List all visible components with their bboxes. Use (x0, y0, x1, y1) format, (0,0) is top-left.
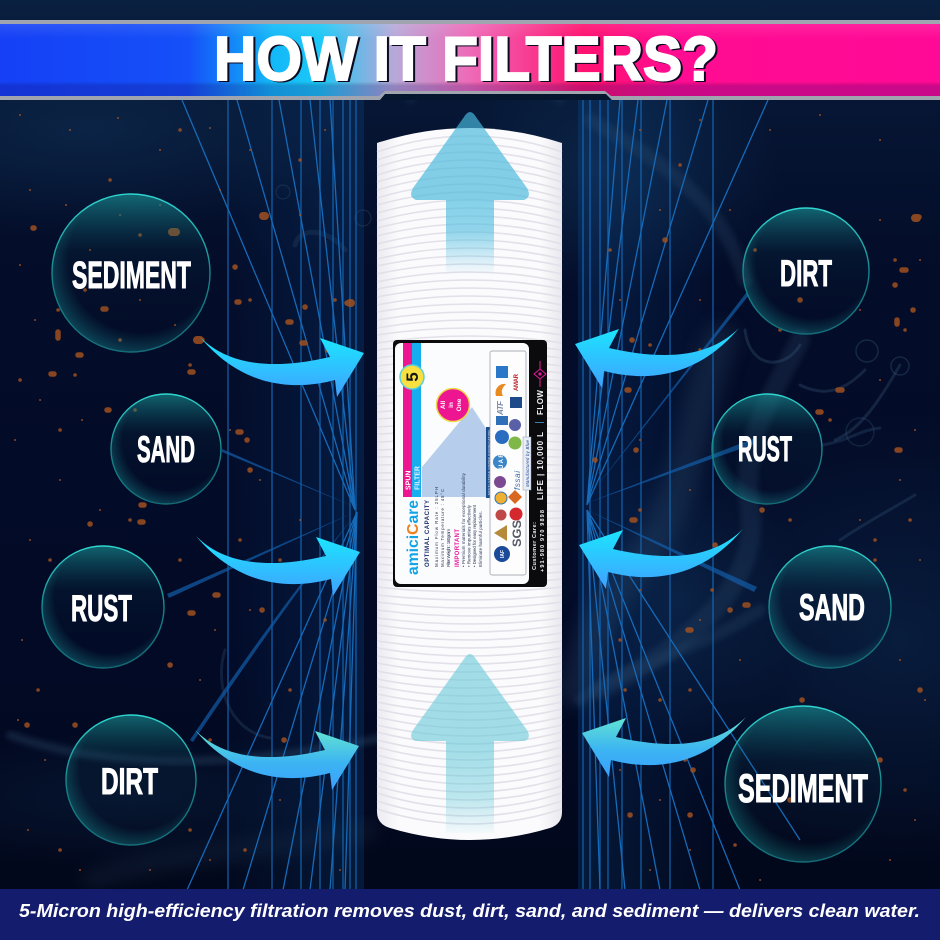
bubble: dirt right (743, 208, 869, 334)
specifications: • Designed for easy replacement (472, 504, 477, 567)
bubble: dirt left: DIRT (101, 761, 158, 802)
product label (393, 340, 547, 587)
bubble: sand left (111, 394, 221, 504)
cartridge body (377, 128, 562, 840)
bubble: sand left: SAND (137, 429, 195, 470)
product label: FILTER (414, 466, 422, 490)
light rays right (583, 100, 800, 890)
customer care: Customer Care: (532, 522, 538, 570)
certification logos: AMAR (514, 373, 520, 391)
specifications: Filter Weight : 160gram (446, 529, 451, 567)
certification logos: UAF (499, 454, 505, 469)
specifications: • Remove impurities effectively (466, 504, 472, 567)
all in one badge (436, 388, 470, 422)
certification logos: ATF (496, 400, 505, 416)
band text: SPUN (406, 471, 412, 490)
flow logo: FLOW (536, 390, 545, 415)
arrow: right middle (579, 529, 743, 589)
footer bar (0, 889, 940, 940)
blue mountain graphic (422, 407, 487, 497)
up arrow: bottom (411, 654, 529, 833)
filter life: LIFE | 10,000 L (536, 432, 545, 500)
customer care (532, 510, 546, 572)
specifications (425, 472, 483, 567)
bubble: sediment right (725, 706, 881, 862)
specifications: • Premium materials for exceptional durability (461, 472, 466, 567)
certification logos: fssai (513, 471, 522, 490)
specifications: Maximum Flow Rate : 25LPH (434, 487, 439, 567)
label white card (395, 343, 529, 584)
bubble: rust right (712, 394, 822, 504)
cartridge ridges (377, 136, 562, 824)
title: HOW IT FILTERS? (214, 25, 718, 94)
bubble: sand right (769, 546, 891, 668)
bubble: dirt right: DIRT (780, 253, 832, 294)
specifications: IMPORTANT (455, 529, 461, 567)
customer care: +91-980 970 9898 (540, 510, 546, 572)
arrow: left bottom (195, 730, 359, 790)
bubble: sediment left: SEDIMENT (72, 255, 191, 297)
all in one badge: One (456, 398, 463, 411)
bubble: sediment left (52, 194, 210, 352)
magenta band (403, 343, 412, 497)
certification logos: SGS (510, 520, 524, 547)
blue strip (486, 427, 492, 498)
cyan band (412, 343, 421, 497)
specifications: OPTIMAL CAPACITY (425, 500, 431, 567)
bubble: rust left: RUST (71, 588, 132, 629)
up arrow: top (411, 112, 529, 275)
certification logos: IAF (500, 550, 506, 558)
specifications: Eliminate harmful particles. (478, 511, 483, 567)
certification logos (490, 351, 526, 575)
all in one badge: in (448, 402, 455, 408)
bubble: sand right: SAND (799, 587, 865, 628)
bubble: rust left (42, 546, 164, 668)
arrow: right top (575, 328, 739, 388)
micron badge: 5 (403, 372, 422, 382)
bubble: sediment right: SEDIMENT (738, 767, 868, 811)
arrow: right bottom (582, 717, 746, 777)
bubble: rust right: RUST (738, 430, 792, 469)
footer caption: 5-Micron high-efficiency filtration removes dust, dirt, sand, and sediment — delivers clean water. (19, 901, 920, 921)
flow logo (534, 361, 546, 423)
blue strip: MULTI-STAGE WATER PURIFICATION (488, 429, 492, 495)
specifications: Maximum Temperature : 45°C (440, 489, 445, 567)
arrow: left middle (196, 536, 360, 596)
brand logo: amiciCare (405, 500, 422, 575)
filter cartridge (377, 112, 562, 840)
micron badge (400, 365, 424, 389)
sediment particles (15, 115, 925, 880)
all in one badge: All (440, 401, 447, 409)
header banner (0, 20, 940, 100)
arrow: left top (200, 337, 364, 397)
bubble: dirt left (66, 715, 196, 845)
manufactured by tag (523, 437, 531, 490)
manufactured by tag: Manufactured by Blue (525, 439, 530, 487)
light rays left (167, 100, 357, 890)
